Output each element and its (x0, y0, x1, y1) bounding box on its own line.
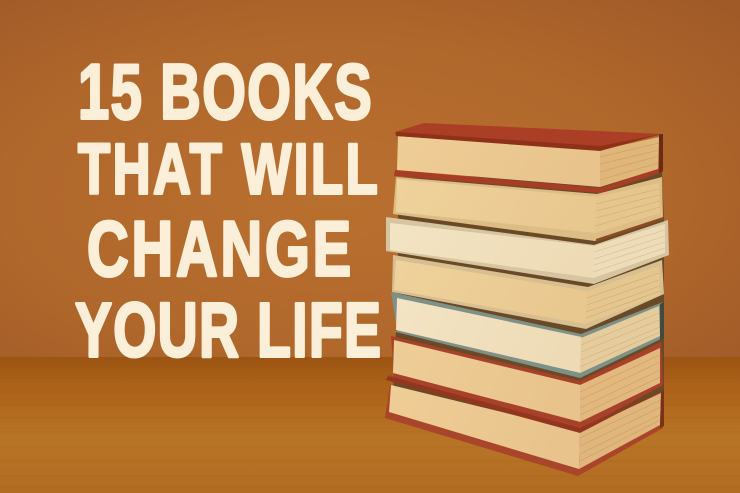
title line: THAT WILL: THAT WILL (78, 130, 378, 209)
book 7: bottom red (385, 385, 664, 476)
book 1 cover (395, 123, 662, 149)
title (75, 48, 381, 374)
book 2: tan (393, 177, 663, 242)
stack shadow backing (392, 172, 664, 470)
title line: 15 BOOKS: 15 BOOKS (78, 48, 372, 136)
wooden floor (0, 357, 740, 493)
book 4: cream tan (392, 255, 664, 329)
title line: CHANGE: CHANGE (87, 205, 351, 293)
book 1: top red (394, 123, 663, 193)
book stack (385, 123, 669, 476)
book 3: cream (386, 217, 669, 284)
book 5: green (391, 292, 664, 378)
title line: YOUR LIFE: YOUR LIFE (75, 288, 381, 374)
wall background (0, 0, 740, 358)
book 6: red (386, 336, 663, 433)
